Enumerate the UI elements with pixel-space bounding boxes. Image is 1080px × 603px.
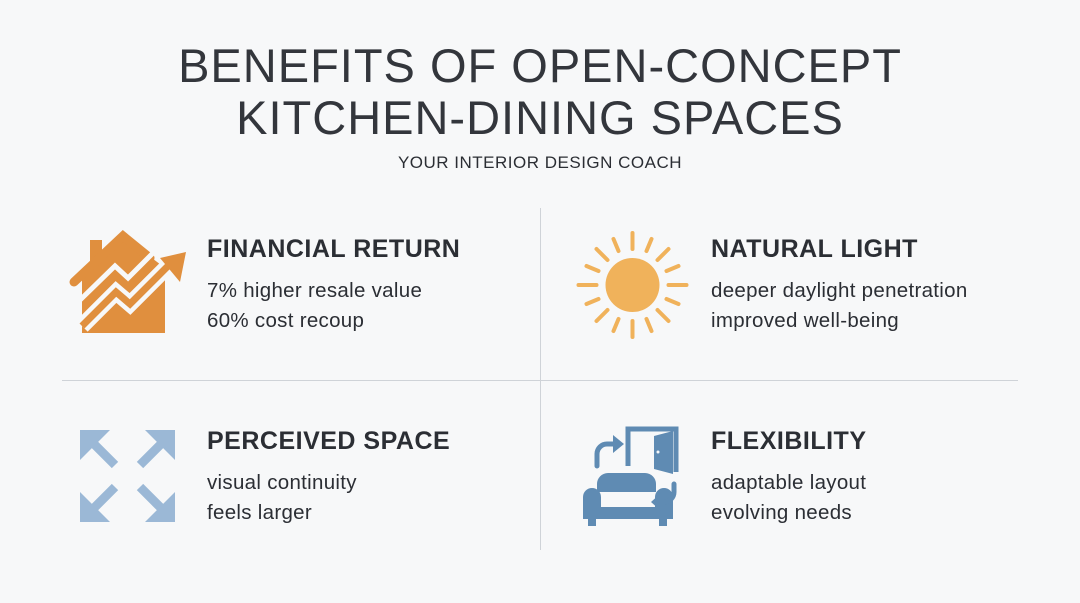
icon: armchair and door [583, 426, 678, 526]
text: natural light: improved well-being [711, 309, 899, 332]
text: perceived space: visual continuity [207, 471, 357, 494]
text: flexibility: evolving needs [711, 501, 852, 524]
icon: sun [576, 231, 688, 339]
text: natural light: deeper daylight penetration [711, 279, 968, 302]
panel: perceived space [80, 427, 450, 524]
title: KITCHEN-DINING SPACES [236, 91, 844, 144]
text: financial return: 7% higher resale value [207, 279, 422, 302]
text: perceived space: PERCEIVED SPACE [207, 427, 450, 455]
text: flexibility [711, 427, 866, 524]
panel: flexibility [583, 426, 866, 526]
text: perceived space: feels larger [207, 501, 312, 524]
subtitle: YOUR INTERIOR DESIGN COACH [398, 153, 682, 172]
text: financial return [207, 235, 460, 332]
text: financial return: 60% cost recoup [207, 309, 364, 332]
panel: financial return [70, 230, 460, 333]
text: financial return: FINANCIAL RETURN [207, 235, 460, 263]
panel: natural light [576, 231, 968, 339]
text: flexibility: adaptable layout [711, 471, 866, 494]
title: BENEFITS OF OPEN-CONCEPT [178, 39, 902, 92]
title [178, 39, 902, 144]
icon: expand arrows [80, 430, 175, 522]
text: natural light: NATURAL LIGHT [711, 235, 918, 263]
text: flexibility: FLEXIBILITY [711, 427, 866, 455]
text: natural light [711, 235, 968, 332]
text: perceived space [207, 427, 450, 524]
icon: house with arrow [70, 230, 186, 333]
